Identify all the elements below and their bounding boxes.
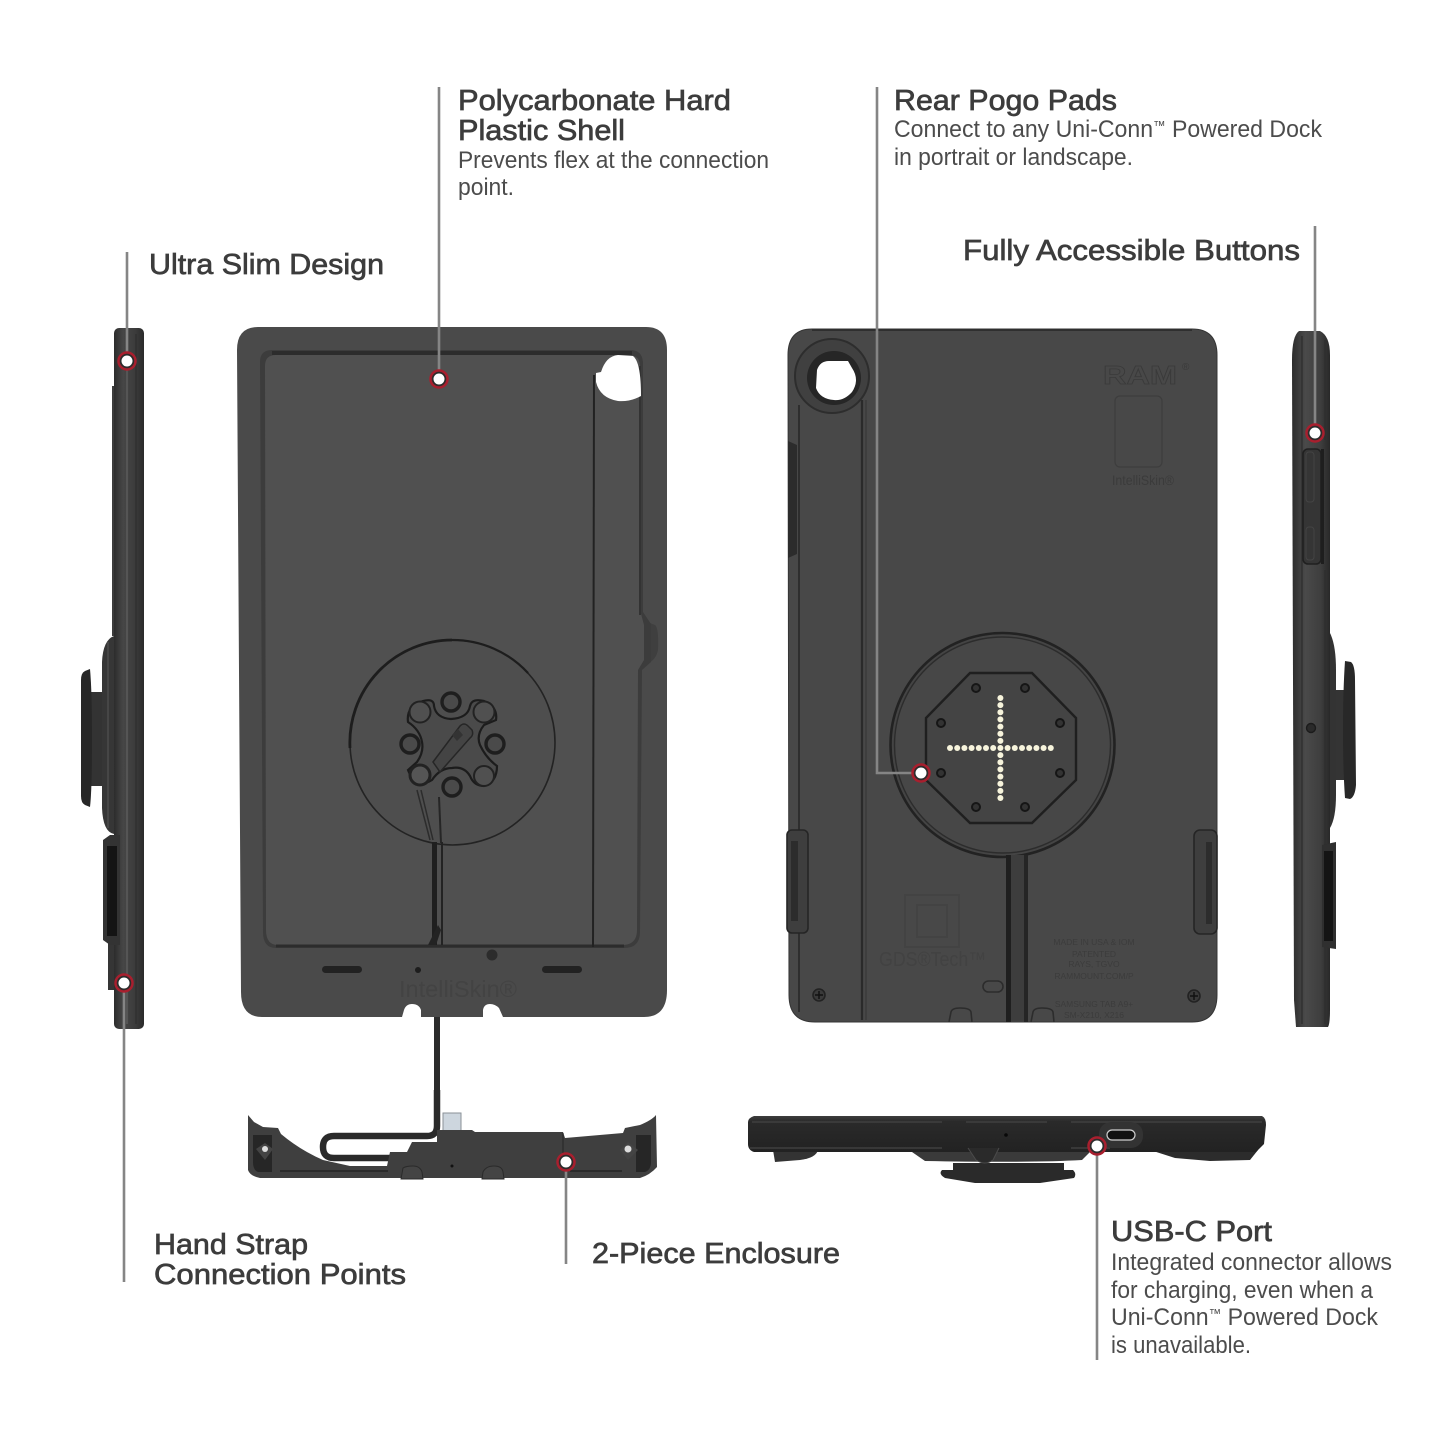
leader: polycarbonate shell [438, 87, 440, 370]
text: rear pogo pads: in portrait or landscape. [894, 144, 1133, 171]
engraved product info: SAMSUNG TAB A9+ [1055, 999, 1133, 1009]
camera ring [795, 339, 869, 413]
text: polycarbonate hard plastic shell: Plastic Shell [458, 115, 625, 147]
device: left side view [81, 328, 144, 1029]
strap cable loop [323, 1090, 437, 1158]
engraved RAM logo [1103, 360, 1190, 488]
boss [1330, 633, 1336, 828]
corner screws [813, 989, 1200, 1002]
engraved RAM logo: IntelliSkin® [1112, 472, 1175, 488]
notch [968, 1148, 999, 1163]
marker: ultra slim [118, 352, 136, 370]
text: USB-C port: USB-C Port [1111, 1216, 1272, 1248]
shell outer frame [237, 327, 667, 1017]
text: ultra slim design: Ultra Slim Design [149, 249, 384, 281]
leader: 2-piece enclosure [565, 1171, 567, 1264]
side button bump [647, 622, 658, 664]
leader: ultra slim design [126, 252, 128, 352]
engraved product info: SM-X210, X216 [1064, 1010, 1124, 1020]
text: USB-C port [1111, 1216, 1392, 1359]
leader: rear pogo pads [877, 87, 912, 773]
text: rear pogo pads: ™ [1153, 118, 1166, 133]
knob [81, 669, 92, 807]
left foot [773, 1150, 818, 1162]
device: bottom edge view [748, 1116, 1266, 1183]
device: rear view [787, 329, 1217, 1022]
text: polycarbonate hard plastic shell: Polycarbonate Hard [458, 85, 731, 117]
leader: hand strap [123, 992, 125, 1282]
speaker slots and pinholes [322, 950, 582, 973]
mount bracket [401, 693, 504, 796]
neck [1334, 690, 1346, 780]
body [1292, 331, 1330, 1027]
text: rear pogo pads: Rear Pogo Pads [894, 85, 1117, 117]
knob [1343, 661, 1356, 799]
USB plug [443, 1113, 461, 1131]
text: 2-piece enclosure: 2-Piece Enclosure [592, 1238, 840, 1270]
text: USB-C port: Integrated connector allows [1111, 1249, 1392, 1276]
text: USB-C port: Powered Dock [1221, 1304, 1379, 1331]
text: hand strap connection points: Hand Strap [154, 1229, 308, 1261]
marker: enclosure [558, 1154, 574, 1170]
right foot [1150, 1150, 1258, 1161]
side pinhole [1306, 724, 1316, 732]
engraved RAM logo: ® [1182, 362, 1190, 373]
text: USB-C port: for charging, even when a [1111, 1277, 1374, 1304]
engraved IntelliSkin: IntelliSkin® [399, 976, 517, 1002]
body [114, 328, 144, 1029]
device: lower enclosure piece [248, 1090, 657, 1179]
plate screws [937, 684, 1064, 811]
text: hand strap connection points [154, 1229, 406, 1291]
strap clips [787, 830, 1217, 934]
marker: polycarbonate [430, 370, 448, 388]
text: rear pogo pads: Connect to any Uni-Conn [894, 116, 1163, 143]
internal cable [417, 790, 443, 945]
text: hand strap connection points: Connection Points [154, 1259, 406, 1291]
engraved product info: RAMMOUNT.COM/P [1054, 971, 1134, 981]
engraved product info: MADE IN USA & IOM [1053, 937, 1135, 947]
inner recess [260, 350, 651, 948]
enclosure body [248, 1115, 657, 1178]
stem [1006, 855, 1028, 1022]
text: USB-C port: is unavailable. [1111, 1332, 1251, 1359]
engraved product info: PATENTED [1072, 949, 1116, 959]
hand strap clip [103, 835, 120, 945]
side buttons [1303, 449, 1324, 564]
text: fully accessible buttons: Fully Accessible Buttons [963, 235, 1300, 267]
mount ring [890, 633, 1114, 857]
engraved product info [1053, 937, 1135, 1020]
mount circle [350, 640, 555, 845]
rear body [788, 329, 1217, 1022]
enclosure tabs [401, 1166, 504, 1179]
screws [442, 693, 460, 711]
lower step [108, 940, 115, 990]
text: rear pogo pads: Powered Dock [1166, 116, 1323, 143]
text: polycarbonate hard plastic shell: point. [458, 174, 514, 201]
leader: fully accessible buttons [1314, 226, 1316, 424]
vertical ridges [788, 400, 866, 1020]
text: USB-C port: ™ [1209, 1306, 1221, 1321]
engraved GDS logo: GDS®Tech™ [879, 949, 986, 971]
USB connector [433, 724, 473, 772]
marker: USB-C [1088, 1138, 1106, 1154]
marker: buttons [1306, 424, 1324, 442]
engraved GDS logo [879, 895, 986, 971]
USB-C port [1099, 1122, 1143, 1148]
knob [941, 1163, 1075, 1183]
boss [102, 636, 114, 834]
neck [90, 692, 103, 786]
marker: pogo pads [912, 764, 930, 782]
leader: USB-C port [1096, 1154, 1098, 1360]
pogo pads cross [947, 695, 1054, 801]
camera cutout [596, 355, 641, 401]
seam lines [750, 1122, 1262, 1148]
main bar [748, 1116, 1266, 1152]
strap clip [1322, 842, 1336, 949]
pen slot line [593, 375, 594, 947]
text: polycarbonate hard plastic shell: Prevents flex at the connection [458, 147, 769, 174]
device: right side view [1292, 331, 1356, 1027]
boss [912, 1152, 1090, 1162]
marker: hand strap [116, 974, 132, 992]
text: USB-C port: Uni-Conn [1111, 1304, 1212, 1331]
device: inner shell front view [237, 327, 667, 1127]
text: rear pogo pads [894, 85, 1323, 171]
engraved product info: RAYS, TGVO [1068, 959, 1120, 969]
text: polycarbonate hard plastic shell [458, 85, 769, 201]
bottom tabs [949, 981, 1054, 1022]
cable below shell [434, 1015, 440, 1127]
engraved RAM logo: RAM [1103, 360, 1177, 390]
corner screw recesses [253, 1135, 651, 1172]
octagon plate [926, 673, 1076, 823]
